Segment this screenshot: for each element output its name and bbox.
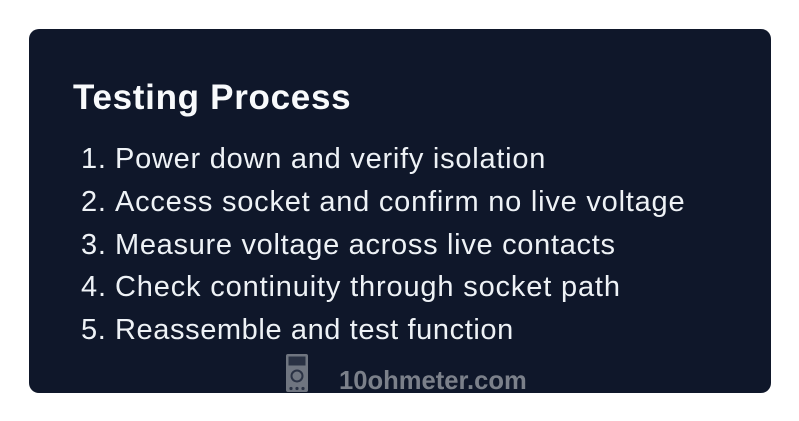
numbered list: Check continuity through socket path xyxy=(115,271,621,303)
icon: multimeter xyxy=(286,354,308,392)
watermark: 10ohmeter.com xyxy=(339,367,527,395)
step 2: 2. xyxy=(81,186,107,218)
heading: Testing Process xyxy=(73,78,351,117)
step 2 xyxy=(81,186,685,218)
numbered list: Measure voltage across live contacts xyxy=(115,229,616,261)
numbered list: Reassemble and test function xyxy=(115,314,514,346)
numbered list: Access socket and confirm no live voltage xyxy=(115,186,685,218)
step 4: 4. xyxy=(81,271,107,303)
numbered list: Power down and verify isolation xyxy=(115,143,546,175)
step 4 xyxy=(81,271,621,303)
step 3 xyxy=(81,229,616,261)
step 1: 1. xyxy=(81,143,107,175)
step 3: 3. xyxy=(81,229,107,261)
step 5: 5. xyxy=(81,314,106,346)
step 1 xyxy=(81,143,546,175)
numbered list xyxy=(81,143,685,346)
step 5 xyxy=(81,314,514,346)
